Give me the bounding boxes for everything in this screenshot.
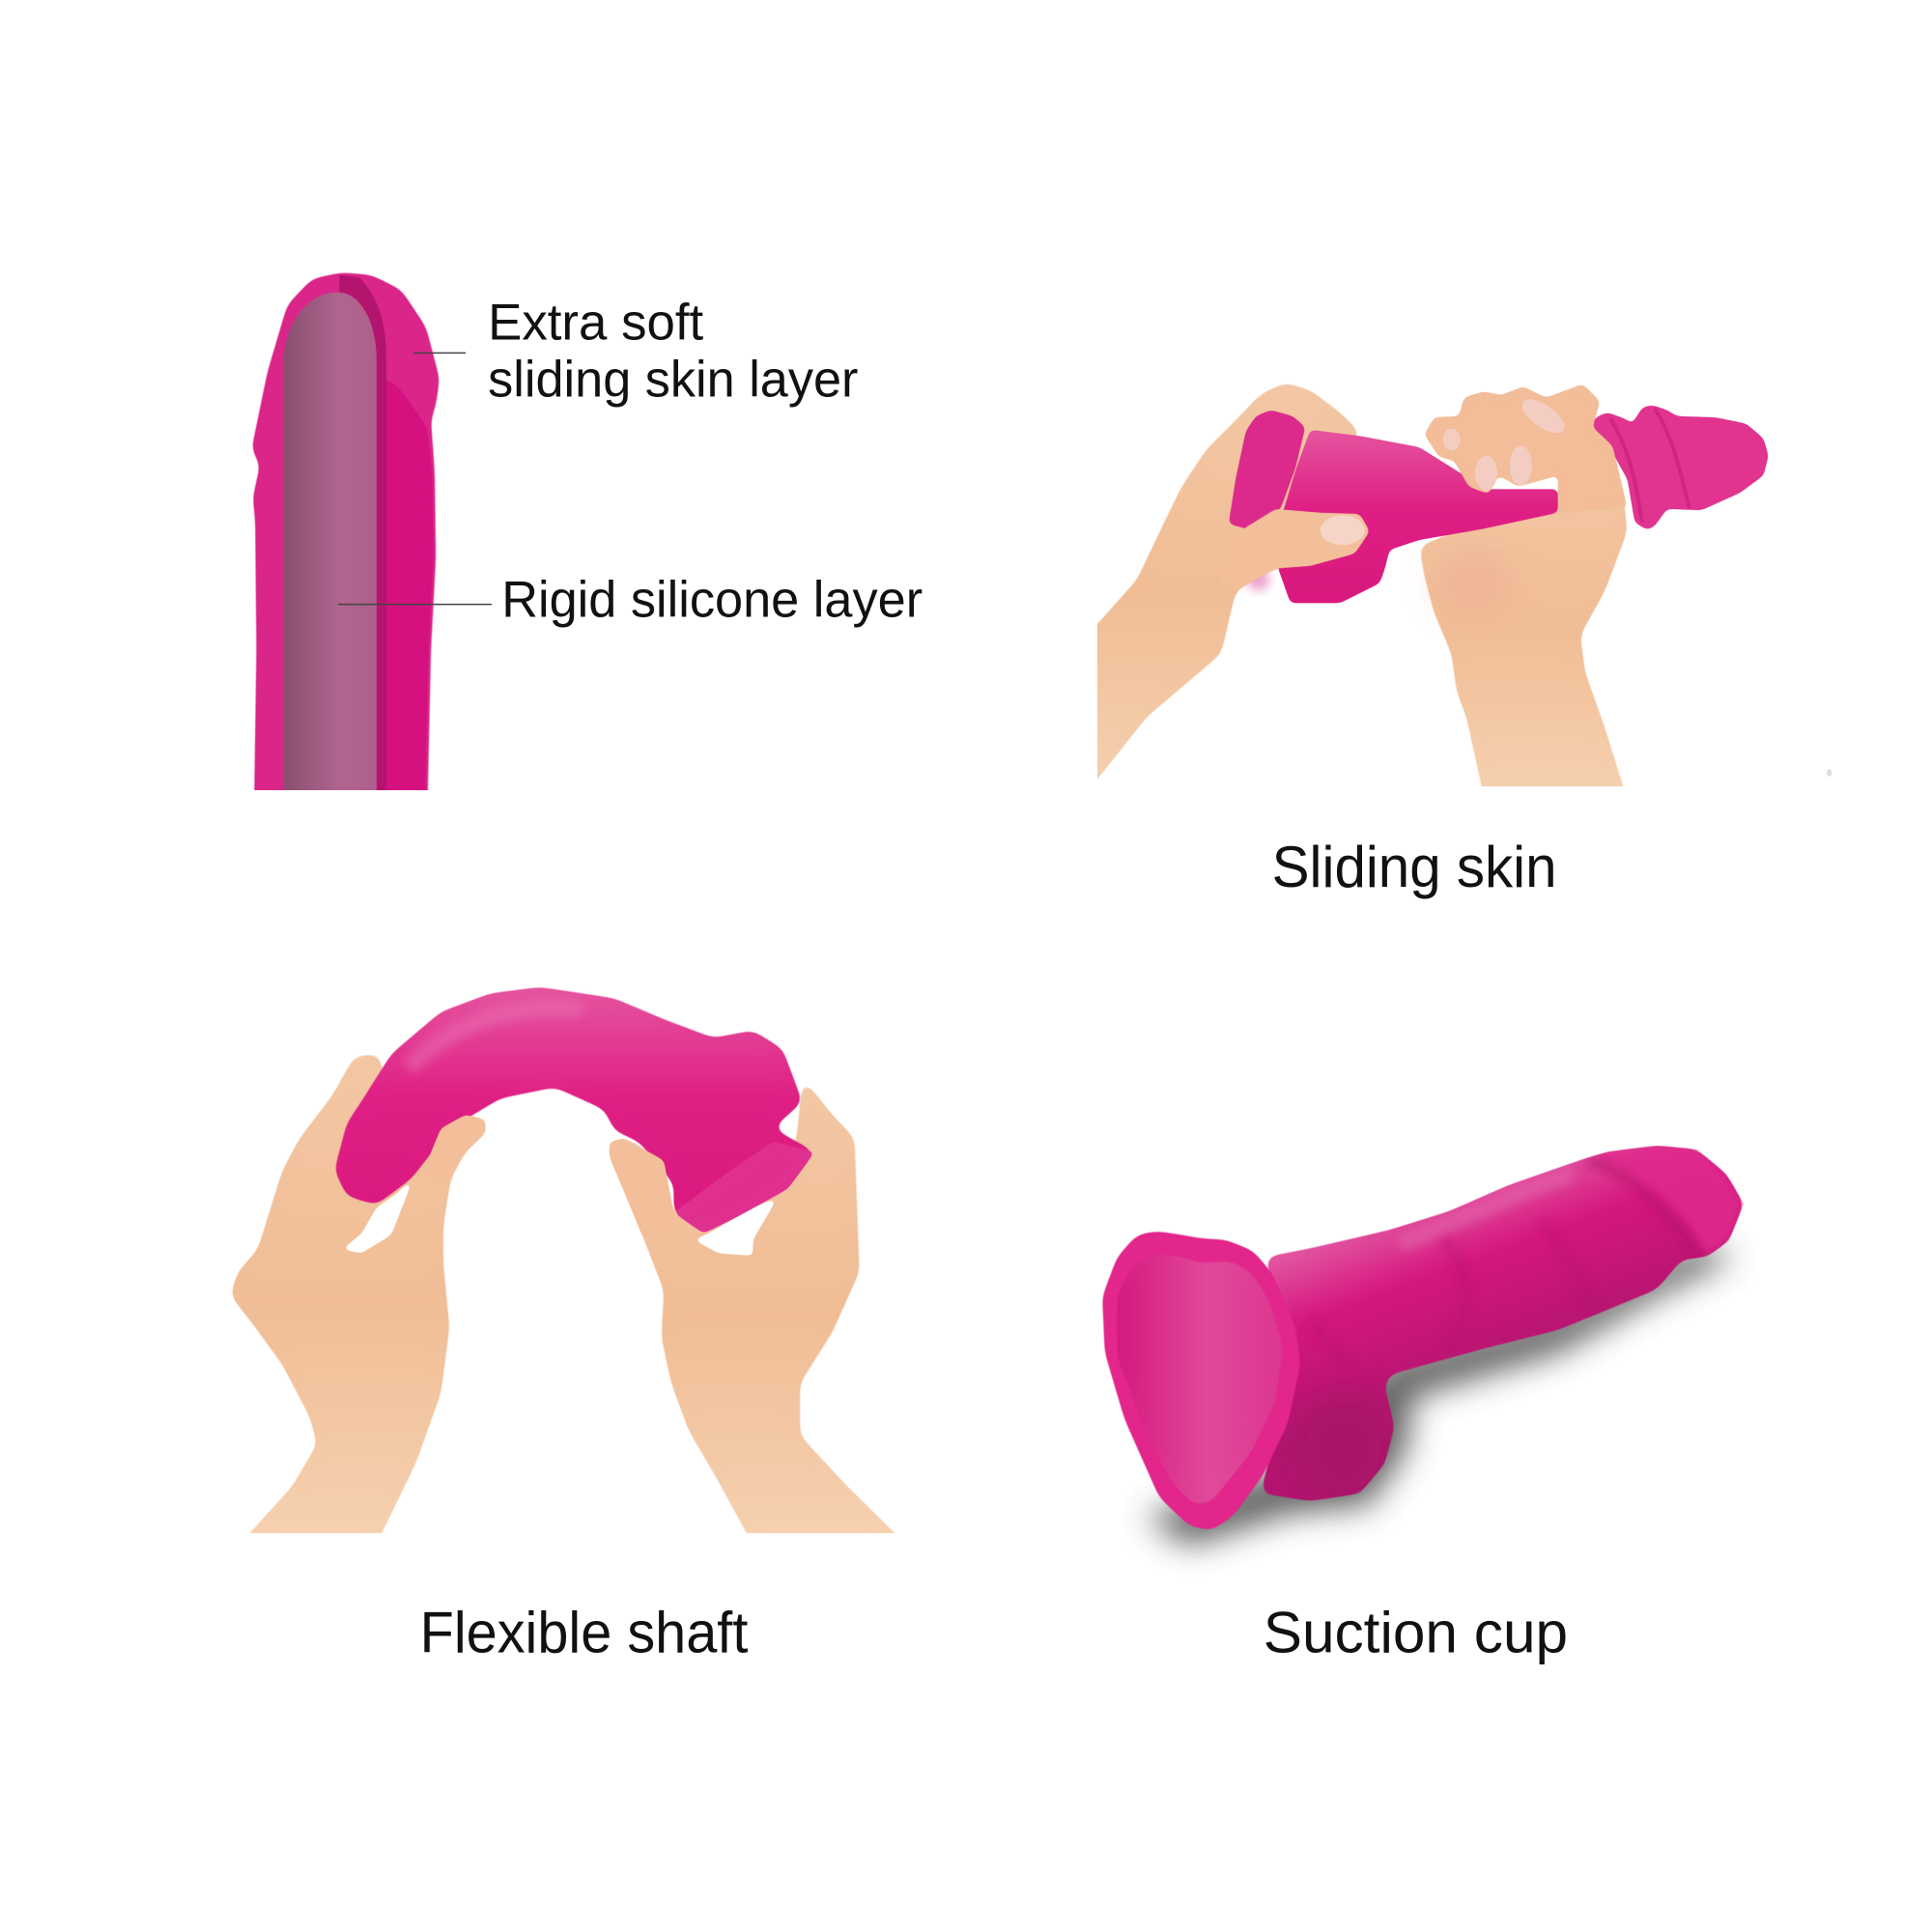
inner shading clipped to body [1294, 1146, 1744, 1503]
palm tint [1425, 562, 1495, 602]
head groove [1588, 1160, 1696, 1256]
heart-shaped cup inner [1117, 1253, 1283, 1505]
cross-section illustration [251, 272, 440, 817]
fingernails of right hand [1443, 393, 1570, 491]
thumb nail [1321, 515, 1365, 545]
caption: flexible shaft: Flexible shaft [420, 1599, 749, 1664]
suction base held in hand [1229, 410, 1305, 530]
suction cup edge [673, 1142, 815, 1234]
fingertip tint behind product [1247, 568, 1269, 591]
hands and product illustration [1075, 383, 1769, 808]
caption: suction cup: Suction cup [1264, 1599, 1568, 1664]
head colour [1590, 1146, 1744, 1257]
left hand [230, 1054, 486, 1554]
leader line: silicone layer [338, 604, 492, 606]
panel: cross-section of layers [251, 272, 923, 817]
left thumb [1242, 509, 1369, 587]
label: rigid silicone layer: Rigid silicone layer [501, 571, 923, 628]
gap in left hand [346, 1184, 410, 1253]
right hand [612, 1087, 895, 1534]
left fingertip over arch [429, 1115, 486, 1159]
panel: sliding skin [1075, 383, 1832, 899]
inner rigid silicone core [284, 293, 377, 817]
surface highlight [1400, 1174, 1573, 1244]
infographic canvas [232, 272, 1832, 1664]
vein shading [1314, 1222, 1559, 1331]
panel: flexible shaft [230, 987, 917, 1664]
outer sliding skin layer [251, 272, 440, 817]
arch highlight [409, 1008, 582, 1067]
gap in right hand [697, 1201, 774, 1256]
speck [1827, 769, 1832, 777]
label: extra soft sliding skin layer: sliding skin layer [488, 351, 858, 408]
heart-shaped cup rim [1102, 1231, 1300, 1531]
label: extra soft sliding skin layer: Extra soft [488, 294, 704, 351]
bent product arch [334, 987, 815, 1234]
panel: suction cup [1102, 1146, 1744, 1664]
inner dark band [339, 275, 386, 817]
right fingertip over arch [609, 1139, 672, 1236]
caption: sliding skin: Sliding skin [1272, 834, 1557, 899]
leader line: skin layer [413, 352, 466, 354]
hands and product illustration [230, 987, 917, 1554]
lower body shading [1294, 1395, 1393, 1503]
right palm and wrist [1420, 458, 1627, 786]
cast shadow [1146, 1244, 1734, 1546]
fingers of right hand [1424, 384, 1628, 513]
ridges on head [1610, 409, 1690, 523]
head of product [1588, 405, 1769, 530]
label: extra soft sliding skin layer [488, 294, 858, 408]
shaft and body [1261, 1146, 1744, 1501]
pulled sliding skin shaft [1278, 430, 1558, 603]
skin right side shade [386, 380, 433, 790]
left hand [1097, 384, 1357, 781]
